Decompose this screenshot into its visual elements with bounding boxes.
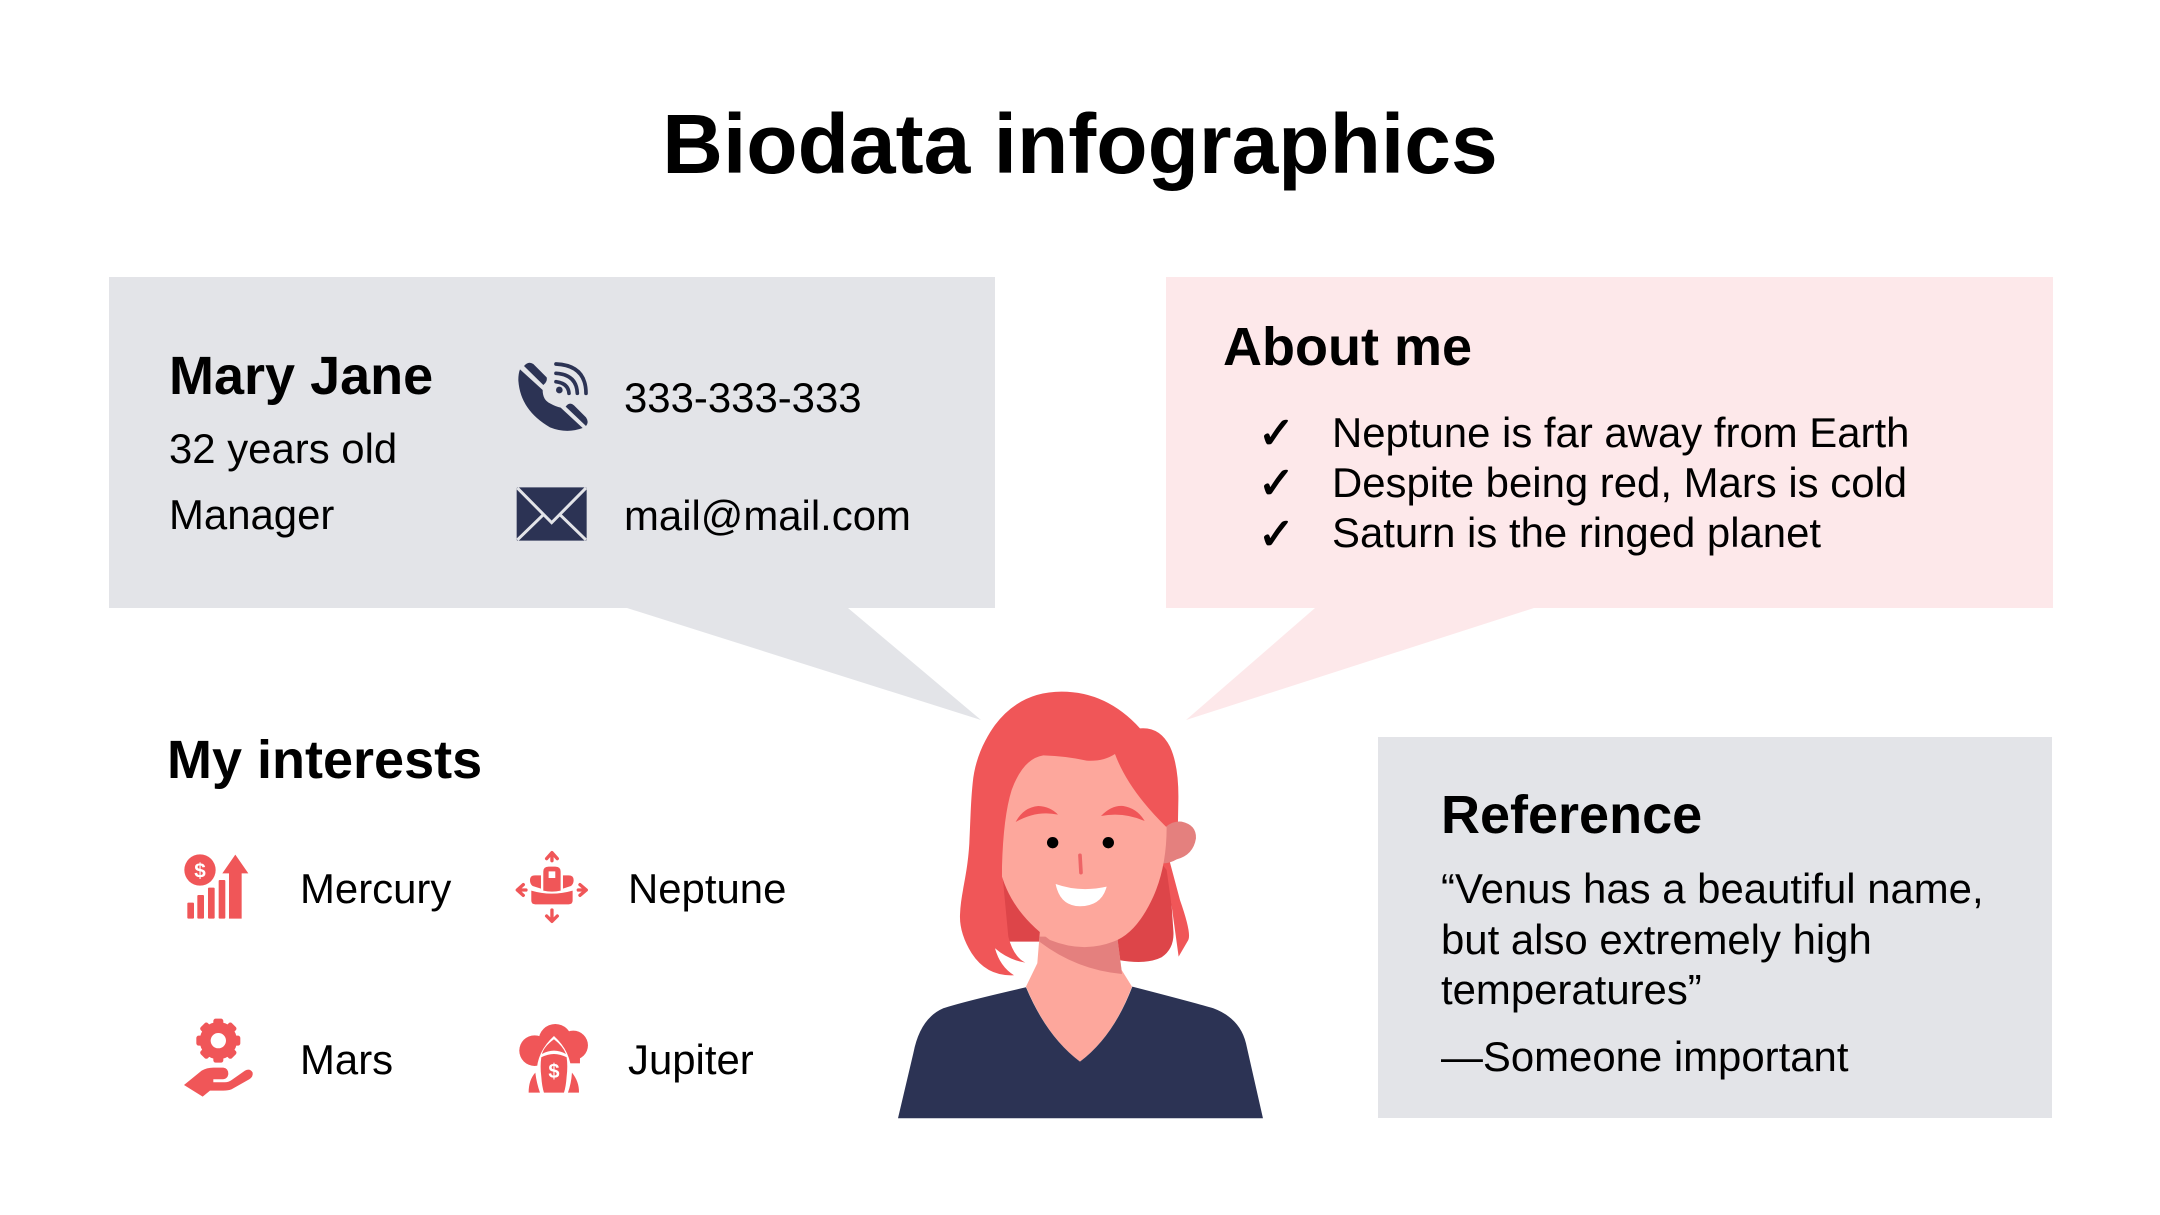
face xyxy=(1002,754,1167,947)
quote: “Venus has a beautiful name, xyxy=(1441,865,1984,912)
shirt xyxy=(898,987,1263,1118)
neck xyxy=(1026,930,1132,1062)
attribution: —Someone important xyxy=(1441,1033,1849,1080)
panel: about me speech bubble xyxy=(1166,277,2053,720)
hair xyxy=(960,692,1189,975)
icon: phone xyxy=(518,363,588,431)
quote xyxy=(1441,865,1984,1013)
panel: contact speech bubble xyxy=(109,277,995,720)
phone number: 333-333-333 xyxy=(624,374,862,421)
icon: mercury chart: $ xyxy=(194,860,206,883)
panel: reference xyxy=(1378,737,2052,1118)
shadowed back hair xyxy=(1002,857,1173,962)
job: Manager xyxy=(169,491,334,538)
label: Mars: Mars xyxy=(300,1036,393,1083)
quote: but also extremely high xyxy=(1441,916,1872,963)
checklist: ✓ xyxy=(1258,408,1295,459)
label: Neptune: Neptune xyxy=(628,865,786,912)
label: Mercury: Mercury xyxy=(300,865,451,912)
icon: neptune briefcase xyxy=(517,853,586,921)
icon: jupiter rocket cloud: $ xyxy=(548,1061,560,1083)
email: mail@mail.com xyxy=(624,492,911,539)
name: Mary Jane xyxy=(169,346,433,406)
interests heading: My interests xyxy=(167,730,482,790)
checklist: Neptune is far away from Earth xyxy=(1332,409,1909,456)
eyebrows xyxy=(1016,806,1145,822)
checklist xyxy=(1258,408,1909,560)
checklist: Saturn is the ringed planet xyxy=(1332,509,1821,556)
label: Jupiter: Jupiter xyxy=(628,1036,754,1083)
icon: envelope xyxy=(517,487,587,541)
smile xyxy=(1056,884,1107,906)
quote: temperatures” xyxy=(1441,966,1702,1013)
age: 32 years old xyxy=(169,425,397,472)
icon: mercury chart xyxy=(184,854,248,919)
icon: mars gear and hand xyxy=(184,1019,253,1097)
icon: jupiter rocket cloud xyxy=(519,1024,588,1095)
nose xyxy=(1074,855,1086,873)
checklist: ✓ xyxy=(1258,509,1295,560)
checklist: ✓ xyxy=(1258,458,1295,509)
ear xyxy=(1163,822,1196,863)
illustration: woman portrait xyxy=(898,692,1263,1118)
reference heading: Reference xyxy=(1441,785,1702,845)
checklist: Despite being red, Mars is cold xyxy=(1332,459,1907,506)
about me heading: About me xyxy=(1223,317,1472,377)
title: Biodata infographics xyxy=(662,97,1498,191)
eyes xyxy=(1047,837,1114,848)
neck shadow xyxy=(1039,937,1122,974)
panel: my interests xyxy=(167,730,786,1097)
